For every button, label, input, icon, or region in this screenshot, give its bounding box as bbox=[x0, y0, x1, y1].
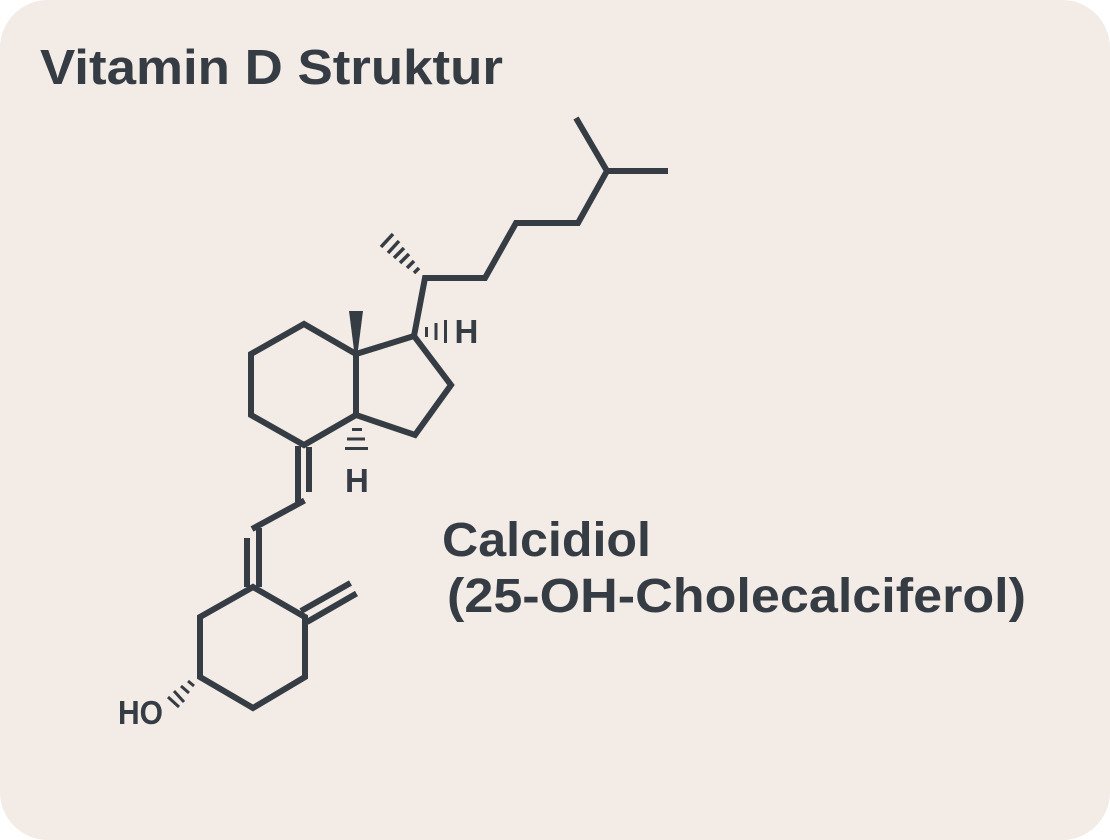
hashed bond: hydroxyl bbox=[168, 681, 194, 707]
linking double bond bbox=[298, 446, 309, 502]
hashed bond: H at ring junction right bbox=[426, 320, 446, 343]
upper six-membered ring bbox=[251, 324, 356, 445]
lower six-membered ring bbox=[200, 587, 305, 708]
compound name line 2: (25-OH-Cholecalciferol) bbox=[447, 570, 1026, 623]
atom label: HO: HO bbox=[118, 694, 163, 731]
side chain bbox=[576, 118, 668, 171]
side chain backbone bbox=[414, 171, 607, 336]
compound name bbox=[442, 514, 1026, 623]
atom label: H lower: H bbox=[345, 462, 369, 499]
hashed bond: H at ring junction lower bbox=[345, 430, 368, 448]
five-membered ring bbox=[356, 336, 451, 435]
linking single bond bbox=[252, 500, 304, 529]
hashed bond: side chain methyl bbox=[381, 234, 419, 273]
compound name line 1: Calcidiol bbox=[442, 514, 651, 567]
atom label: H right: H bbox=[454, 313, 478, 350]
methyl wedge bbox=[349, 311, 363, 354]
chart: calcidiol molecular structure bbox=[168, 118, 668, 708]
title: Vitamin D Struktur bbox=[40, 41, 503, 95]
second linking double bond bbox=[247, 528, 259, 587]
exocyclic methylene double bond bbox=[301, 583, 356, 622]
